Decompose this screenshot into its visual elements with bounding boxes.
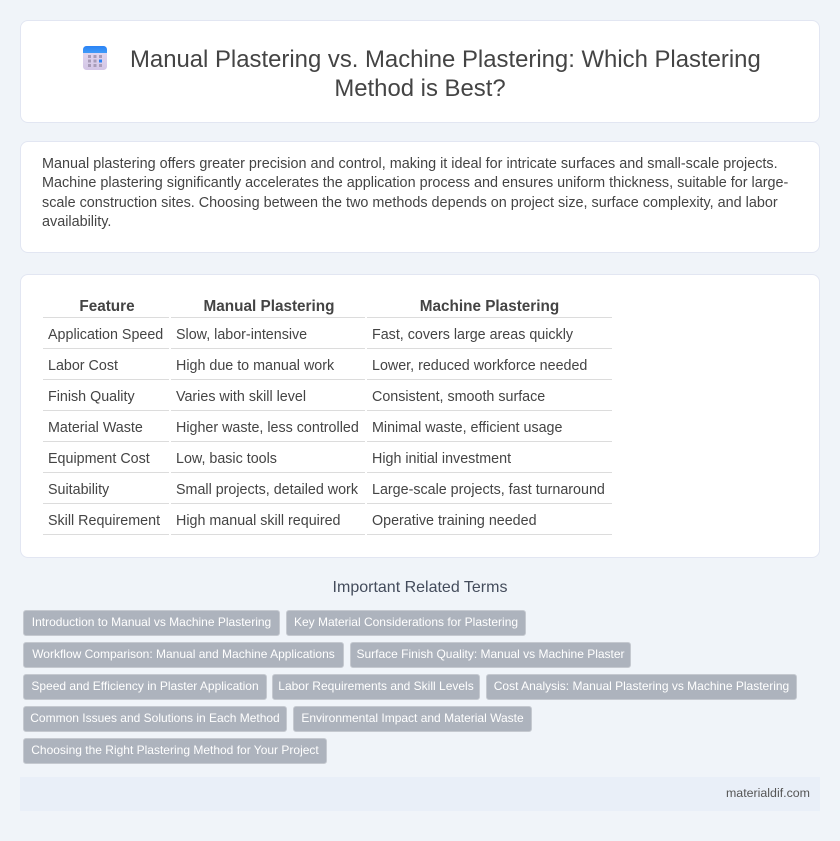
text block: intro: availability.: [42, 214, 111, 230]
text: Slow, labor-intensive: [176, 327, 307, 343]
text: Equipment Cost: [48, 451, 150, 467]
text: High manual skill required: [176, 513, 340, 529]
footer source text: materialdif.com: [726, 786, 810, 800]
related term tags: Key Material Considerations for Plastering: [294, 615, 518, 629]
comparison table: [79, 298, 559, 315]
related term tags: Labor Requirements and Skill Levels: [278, 679, 474, 693]
text: Fast, covers large areas quickly: [372, 327, 573, 343]
related term tags: Speed and Efficiency in Plaster Application: [31, 679, 259, 693]
panel: comparison table: [20, 274, 820, 558]
text: Higher waste, less controlled: [176, 420, 359, 436]
related term tags: [23, 610, 797, 764]
text: Consistent, smooth surface: [372, 389, 545, 405]
text block: intro: Machine plastering significantly accelerates the application process and ensures uniform thickness, suitable for large-: [42, 175, 788, 191]
related term tags: Workflow Comparison: Manual and Machine Applications: [32, 647, 335, 661]
text: High due to manual work: [176, 358, 334, 374]
text block: intro: Manual plastering offers greater precision and control, making it ideal for intricate surfaces and small-scale projects.: [42, 156, 778, 172]
related term tags: Common Issues and Solutions in Each Method: [30, 711, 280, 725]
text: Application Speed: [48, 327, 163, 343]
title: Manual Plastering vs. Machine Plastering: Which Plastering: [130, 46, 761, 73]
related term tags: Introduction to Manual vs Machine Plastering: [32, 615, 271, 629]
text: Skill Requirement: [48, 513, 160, 529]
text: Suitability: [48, 482, 109, 498]
text: Lower, reduced workforce needed: [372, 358, 587, 374]
title: [130, 46, 761, 102]
icon: calendar: [83, 46, 107, 70]
text: Minimal waste, efficient usage: [372, 420, 562, 436]
text: High initial investment: [372, 451, 511, 467]
text block: intro: [42, 156, 788, 230]
heading: related terms: Important Related Terms: [333, 579, 507, 596]
text: Small projects, detailed work: [176, 482, 358, 498]
related term tags: Choosing the Right Plastering Method for Your Project: [31, 743, 319, 757]
text: Operative training needed: [372, 513, 537, 529]
panel: title card: [20, 20, 820, 123]
text: Low, basic tools: [176, 451, 277, 467]
text: Finish Quality: [48, 389, 135, 405]
footer: [20, 777, 820, 811]
panel: intro paragraph: [20, 141, 820, 253]
comparison table: Manual Plastering: [204, 298, 334, 315]
text: Large-scale projects, fast turnaround: [372, 482, 605, 498]
text: Varies with skill level: [176, 389, 306, 405]
text block: intro: scale construction sites. Choosing between the two methods depends on project size, surface complexity, and labor: [42, 195, 778, 211]
title: Method is Best?: [334, 75, 506, 102]
comparison table: Machine Plastering: [420, 298, 559, 315]
related term tags: Surface Finish Quality: Manual vs Machine Plaster: [356, 647, 625, 661]
related term tags: Cost Analysis: Manual Plastering vs Machine Plastering: [494, 679, 789, 693]
comparison table: Feature: [79, 298, 135, 315]
text: Material Waste: [48, 420, 143, 436]
related term tags: Environmental Impact and Material Waste: [301, 711, 524, 725]
text: Labor Cost: [48, 358, 118, 374]
